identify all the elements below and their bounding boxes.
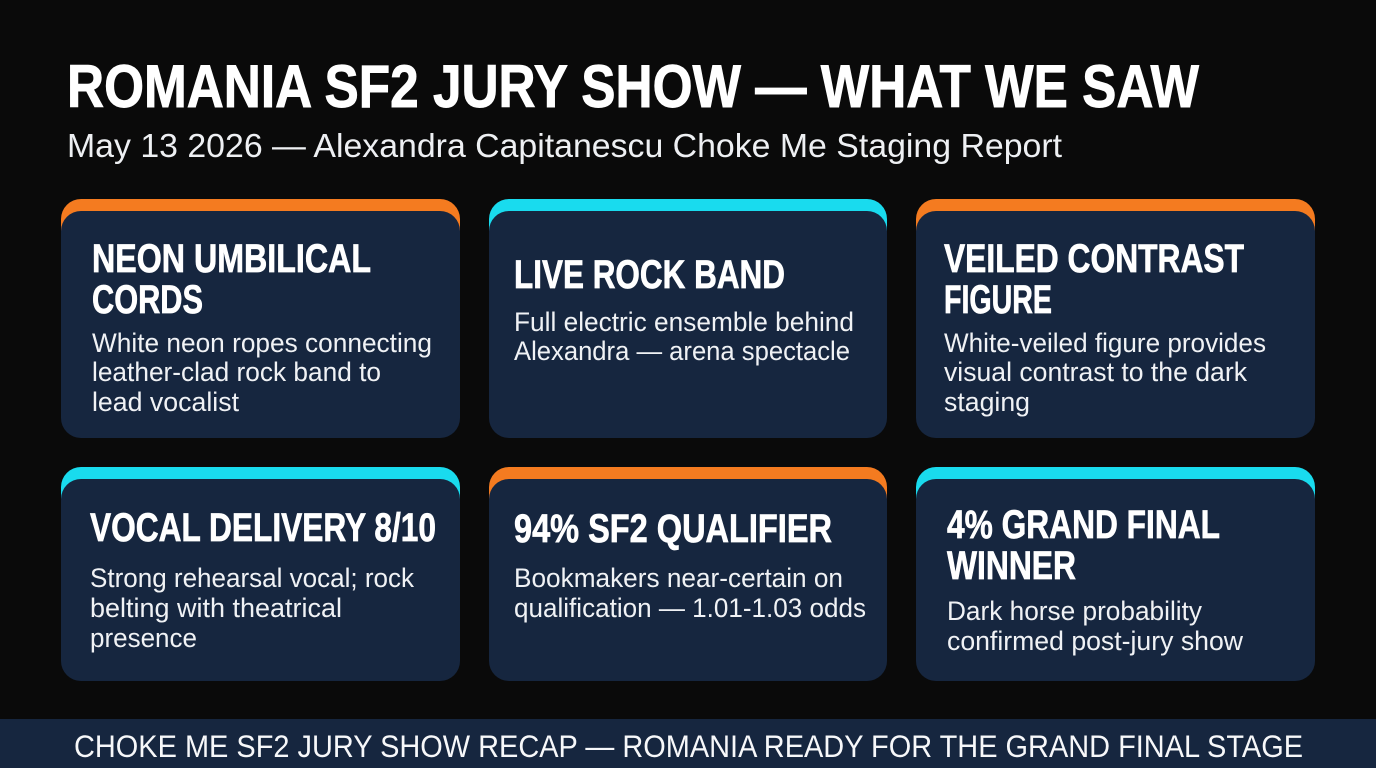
- panel: grand final winner: [916, 467, 1315, 681]
- text: sf2 qualifier description: [514, 563, 866, 623]
- panel: live rock band: [489, 199, 887, 438]
- text: sf2 qualifier description: Bookmakers near-certain on: [514, 563, 843, 593]
- panel: neon umbilical cords: [61, 199, 460, 438]
- text: live rock band description: [514, 307, 854, 366]
- text: vocal delivery description: Strong rehearsal vocal; rock: [90, 563, 414, 593]
- text: vocal delivery description: belting with theatrical: [90, 593, 342, 623]
- text: grand final winner description: confirmed post-jury show: [947, 626, 1243, 656]
- heading: vocal delivery 8/10: VOCAL DELIVERY 8/10: [90, 506, 436, 550]
- title: ROMANIA SF2 JURY SHOW — WHAT WE SAW: [67, 53, 1199, 120]
- text: neon umbilical cords description: White neon ropes connecting: [92, 328, 432, 358]
- heading: 4% grand final winner: [947, 503, 1220, 588]
- text: grand final winner description: Dark horse probability: [947, 596, 1202, 626]
- heading: neon umbilical cords: [92, 237, 371, 322]
- text: grand final winner description: [947, 596, 1243, 656]
- text: neon umbilical cords description: lead vocalist: [92, 387, 239, 417]
- text: live rock band description: Alexandra — arena spectacle: [514, 336, 850, 366]
- text: vocal delivery description: [90, 563, 414, 653]
- text: neon umbilical cords description: leather-clad rock band to: [92, 357, 381, 387]
- subtitle: May 13 2026 — Alexandra Capitanescu Choke Me Staging Report: [67, 128, 1063, 165]
- text: veiled contrast figure description: visual contrast to the dark: [944, 357, 1247, 387]
- text: sf2 qualifier description: qualification — 1.01-1.03 odds: [514, 593, 866, 623]
- panel: vocal delivery: [61, 467, 460, 681]
- panel: sf2 qualifier: [489, 467, 887, 681]
- text: veiled contrast figure description: White-veiled figure provides: [944, 328, 1266, 358]
- heading: 4% grand final winner: 4% GRAND FINAL: [947, 503, 1220, 547]
- panel: veiled contrast figure: [916, 199, 1315, 438]
- heading: 94% sf2 qualifier: 94% SF2 QUALIFIER: [514, 507, 832, 551]
- text: vocal delivery description: presence: [90, 623, 197, 653]
- heading: neon umbilical cords: NEON UMBILICAL: [92, 237, 371, 281]
- heading: neon umbilical cords: CORDS: [92, 278, 203, 322]
- heading: veiled contrast figure: [944, 237, 1244, 322]
- text: neon umbilical cords description: [92, 328, 432, 417]
- heading: veiled contrast figure: VEILED CONTRAST: [944, 237, 1244, 281]
- heading: veiled contrast figure: FIGURE: [944, 278, 1052, 322]
- heading: 4% grand final winner: WINNER: [947, 544, 1076, 588]
- footer banner: [0, 719, 1376, 768]
- text: live rock band description: Full electric ensemble behind: [514, 307, 854, 337]
- text: veiled contrast figure description: [944, 328, 1266, 417]
- footer text: CHOKE ME SF2 JURY SHOW RECAP — ROMANIA READY FOR THE GRAND FINAL STAGE: [74, 728, 1303, 764]
- heading: live rock band: LIVE ROCK BAND: [514, 253, 785, 297]
- text: veiled contrast figure description: staging: [944, 387, 1030, 417]
